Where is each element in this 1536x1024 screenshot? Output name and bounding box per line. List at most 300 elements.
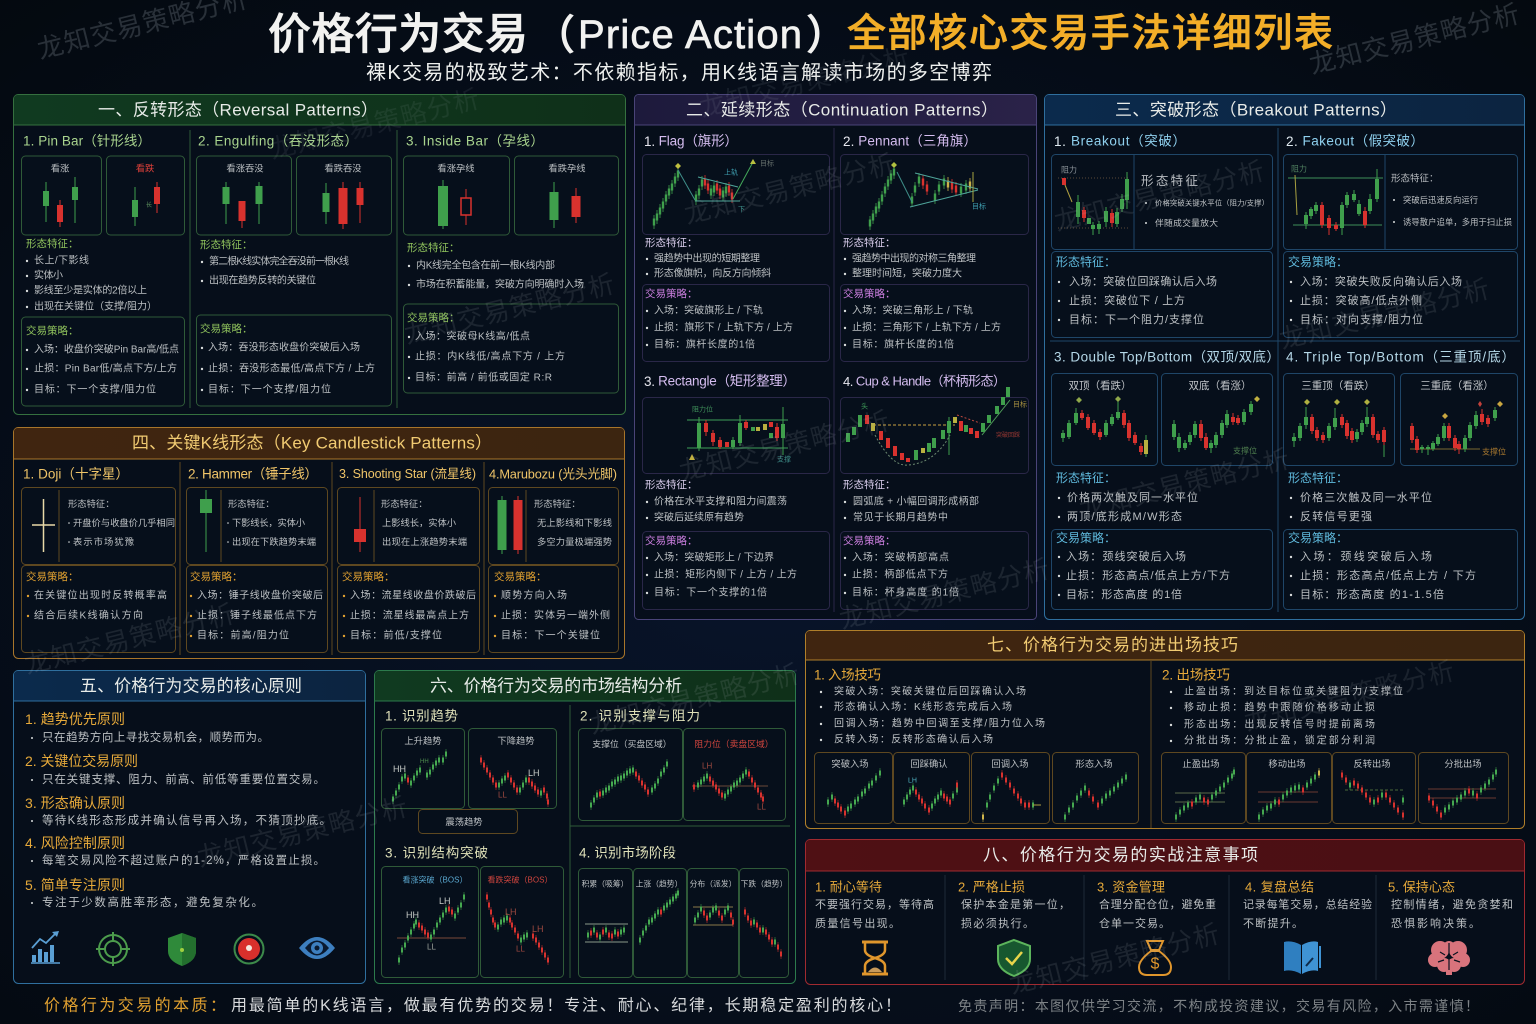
uptrend chart: 上升趋势 bbox=[404, 735, 442, 746]
sub-section: double top bottom bbox=[1052, 350, 1280, 610]
downtrend chart: 下降趋势 bbox=[497, 735, 535, 746]
downtrend chart: LL bbox=[498, 790, 507, 800]
icon: blue book bbox=[1284, 941, 1320, 974]
chart: breakout entry: 突破入场 bbox=[831, 758, 869, 769]
flag title: 1. Flag（旗形） bbox=[644, 134, 738, 148]
flag chart: 上轨 bbox=[724, 168, 738, 176]
triple top bottom strategy: 目标：形态高度 的1-1.5倍 bbox=[1300, 587, 1444, 601]
triple bottom chart bbox=[1400, 374, 1518, 466]
fakeout title: 2. Fakeout（假突破） bbox=[1286, 134, 1424, 148]
watermarks: 龙知交易策略分析 bbox=[1051, 155, 1268, 237]
principles list: 2. 关键位交易原则 bbox=[25, 753, 138, 769]
marubozu strategy bbox=[488, 566, 618, 652]
engulfing strategy: 止损：吞没形态最低/高点下方 / 上方 bbox=[208, 362, 375, 374]
heading: candlesticks: 四、关键K线形态（Key Candlestick Patterns） bbox=[132, 434, 492, 452]
note: review: 不断提升。 bbox=[1243, 916, 1303, 930]
chart: reversal exit: 反转出场 bbox=[1353, 758, 1391, 769]
watermarks: 龙知交易策略分析 bbox=[1006, 918, 1223, 1000]
fakeout strategy: 入场：突破失败反向确认后入场 bbox=[1300, 274, 1462, 288]
double top bottom features: 形态特征： bbox=[1056, 470, 1116, 485]
inside bar features bbox=[407, 241, 584, 290]
fakeout strategy: 交易策略： bbox=[1288, 254, 1348, 269]
shooting star strategy bbox=[338, 566, 480, 652]
icon: money bag bbox=[1139, 941, 1171, 975]
pin bar strategy: 交易策略： bbox=[26, 324, 78, 337]
bullish BOS chart: HH bbox=[406, 910, 419, 920]
triple top bottom features: 价格三次触及同一水平位 bbox=[1300, 490, 1432, 504]
distribution chart bbox=[688, 868, 738, 978]
flag chart bbox=[642, 154, 830, 234]
sub-section: rectangle bbox=[642, 374, 830, 610]
fakeout inner features: 突破后迅速反向运行 bbox=[1403, 195, 1478, 205]
hammer strategy: 止损：锤子线最低点下方 bbox=[197, 608, 317, 622]
shooting star strategy: 目标：前低/支撑位 bbox=[350, 628, 442, 642]
principles list: 只在趋势方向上寻找交易机会，顺势而为。 bbox=[42, 730, 269, 744]
pennant chart bbox=[840, 154, 1028, 234]
cup and handle strategy: 止损：柄部低点下方 bbox=[852, 568, 948, 580]
bullish BOS chart bbox=[382, 866, 478, 978]
bearish BOS chart: LH bbox=[505, 907, 517, 917]
heading: notes: 八、价格行为交易的实战注意事项 bbox=[983, 846, 1258, 864]
subtitle: 裸K交易的极致艺术：不依赖指标，用K线语言解读市场的多空博弈 bbox=[366, 61, 992, 84]
panel: continuation patterns bbox=[634, 94, 1036, 620]
inside bar strategy: 止损：内K线低/高点下方 / 上方 bbox=[415, 350, 565, 362]
principles list: 1. 趋势优先原则 bbox=[25, 711, 125, 727]
rectangle chart: 支撑 bbox=[777, 454, 791, 464]
exit techniques text: 移动止损：趋势中跟随价格移动止损 bbox=[1184, 700, 1375, 714]
inside bar strategy: 入场：突破母K线高/低点 bbox=[415, 330, 530, 342]
support chart: 支撑位（买盘区域） bbox=[592, 738, 672, 749]
triple top bottom features: 反转信号更强 bbox=[1300, 509, 1372, 523]
title bbox=[268, 11, 1333, 59]
chart: scale-out exit: 分批出场 bbox=[1444, 758, 1482, 769]
entry techniques text: 反转入场：反转形态确认后入场 bbox=[834, 732, 993, 746]
pin bar features: 形态特征： bbox=[26, 237, 78, 250]
fakeout strategy bbox=[1284, 252, 1518, 338]
fakeout inner features bbox=[1391, 172, 1512, 227]
inside bar features: 内K线完全包含在前一根K线内部 bbox=[416, 258, 555, 272]
shooting star strategy: 交易策略： bbox=[342, 570, 394, 583]
panel: breakout patterns bbox=[1044, 94, 1524, 620]
triple top chart bbox=[1284, 374, 1394, 466]
bearish BOS chart bbox=[480, 866, 564, 978]
heading: continuation: 二、延续形态（Continuation Patterns） bbox=[686, 100, 998, 120]
triple top bottom features bbox=[1288, 470, 1432, 523]
pin bar features: 实体小 bbox=[34, 268, 63, 282]
pin bar strategy: 目标：下一个支撑/阻力位 bbox=[34, 382, 156, 396]
bearish inside bar chart: 看跌孕线 bbox=[548, 162, 586, 174]
rectangle strategy: 止损：矩形内侧下 / 上方 / 上方 bbox=[654, 568, 797, 580]
double top chart: 双顶（看跌） bbox=[1068, 379, 1132, 392]
bearish pin bar chart: 长 bbox=[146, 201, 152, 209]
bearish engulfing chart bbox=[296, 156, 392, 235]
double top bottom title: 3. Double Top/Bottom（双顶/双底） bbox=[1054, 350, 1280, 364]
shooting star card: 形态特征： bbox=[381, 498, 428, 509]
icon: money bag: $ bbox=[1151, 956, 1160, 972]
watermarks: 龙知交易策略分析 bbox=[676, 405, 893, 487]
pin bar features bbox=[26, 237, 157, 312]
bearish engulfing chart: 看跌吞没 bbox=[324, 162, 362, 174]
pennant strategy: 止损：三角形下 / 上轨下方 / 上方 bbox=[852, 320, 1001, 334]
bullish BOS chart: 看涨突破（BOS） bbox=[403, 874, 467, 884]
rectangle strategy: 交易策略： bbox=[645, 534, 698, 547]
flag chart: 下 bbox=[738, 206, 745, 214]
double top chart bbox=[1052, 374, 1158, 466]
principles list: 5. 简单专注原则 bbox=[25, 877, 125, 893]
flag chart: 目标 bbox=[760, 158, 774, 168]
marubozu strategy: 顺势方向入场 bbox=[501, 588, 567, 602]
panel: reversal patterns bbox=[14, 94, 626, 414]
chart: trailing stop exit bbox=[1246, 752, 1332, 824]
breakout strategy: 止损：突破位下 / 上方 bbox=[1069, 293, 1185, 307]
entry techniques text: 形态确认入场：K线形态完成后入场 bbox=[834, 700, 1012, 713]
sub-section: engulfing bbox=[196, 134, 392, 406]
bearish BOS chart: 看跌突破（BOS） bbox=[488, 874, 552, 884]
icon: red target bbox=[234, 934, 264, 964]
hammer strategy: 目标：前高/阻力位 bbox=[197, 628, 289, 642]
panel: core principles bbox=[14, 670, 366, 984]
shooting star strategy: 止损：流星线最高点上方 bbox=[350, 608, 469, 622]
engulfing strategy bbox=[196, 315, 392, 406]
triple top bottom features: 形态特征： bbox=[1288, 470, 1348, 485]
triple top bottom strategy bbox=[1284, 530, 1518, 610]
hammer strategy: 交易策略： bbox=[190, 570, 242, 583]
exit techniques text: 分批出场：分批止盈，锁定部分利润 bbox=[1184, 734, 1375, 746]
note: mindset: 恐惧影响决策。 bbox=[1391, 916, 1480, 930]
chart: breakout entry bbox=[814, 752, 892, 824]
pennant strategy: 目标：旗杆长度的1倍 bbox=[852, 338, 954, 350]
icon: green target bbox=[96, 932, 130, 966]
heading: breakout: 三、突破形态（Breakout Patterns） bbox=[1115, 100, 1397, 120]
principles list: 3. 形态确认原则 bbox=[25, 795, 125, 811]
sub-section: pennant bbox=[840, 134, 1028, 362]
footer essence statement: 用最简单的K线语言，做最有优势的交易！专注、耐心、纪律，长期稳定盈利的核心！ bbox=[231, 996, 901, 1014]
rectangle features: 突破后延续原有趋势 bbox=[654, 510, 744, 524]
title: 价格行为交易 bbox=[268, 11, 528, 59]
engulfing features: 出现在趋势反转的关键位 bbox=[209, 274, 316, 286]
principles list: 4. 风险控制原则 bbox=[25, 835, 125, 851]
triple bottom chart: 支撑位 bbox=[1482, 446, 1506, 456]
marubozu strategy: 止损：实体另一端外侧 bbox=[501, 608, 610, 622]
exit techniques text: 止盈出场：到达目标位或关键阻力/支撑位 bbox=[1184, 684, 1403, 698]
note: stop loss: 保护本金是第一位， bbox=[961, 897, 1070, 911]
watermarks: 龙知交易策略分析 bbox=[586, 658, 803, 740]
pin bar features: 出现在关键位（支撑/阻力） bbox=[34, 300, 157, 312]
marubozu card: 形态特征： bbox=[534, 498, 580, 509]
cup and handle strategy: 入场：突破柄部高点 bbox=[852, 550, 949, 564]
principles list: 专注于少数高胜率形态，避免复杂化。 bbox=[42, 895, 263, 909]
breakout chart box bbox=[1052, 154, 1272, 250]
icon: brain bbox=[1428, 941, 1470, 975]
note: review bbox=[1243, 880, 1372, 930]
watermarks: 龙知交易策略分析 bbox=[194, 791, 411, 873]
chart: pattern entry bbox=[1052, 752, 1138, 824]
sideways trend label bbox=[418, 810, 518, 834]
engulfing features bbox=[200, 238, 349, 286]
engulfing strategy: 目标：下一个支撑/阻力位 bbox=[208, 382, 331, 396]
chart: pullback entry: 回调入场 bbox=[991, 759, 1029, 769]
pennant features bbox=[843, 236, 976, 280]
sub-section: marubozu bbox=[488, 466, 618, 652]
resistance chart: 阻力位（卖盘区域） bbox=[694, 738, 774, 749]
note: stop loss: 2. 严格止损 bbox=[958, 880, 1025, 894]
uptrend chart bbox=[382, 728, 464, 808]
watermarks: 龙知交易策略分析 bbox=[681, 148, 898, 230]
heading: principles: 五、价格行为交易的核心原则 bbox=[80, 676, 302, 696]
rectangle features: 价格在水平支撑和阻力间震荡 bbox=[654, 494, 787, 508]
resistance chart: LH bbox=[702, 762, 712, 770]
triple top bottom strategy: 交易策略： bbox=[1288, 530, 1348, 545]
shooting star card bbox=[338, 488, 480, 564]
triple bottom chart: 三重底（看涨） bbox=[1420, 379, 1494, 392]
heading: entry exit: 七、价格行为交易的进出场技巧 bbox=[987, 636, 1238, 654]
bullish BOS chart: LH bbox=[439, 896, 451, 906]
marubozu strategy: 交易策略： bbox=[494, 570, 546, 583]
hammer strategy: 入场：锤子线收盘价突破后 bbox=[197, 588, 323, 602]
sub-section: shooting star bbox=[338, 467, 480, 652]
note: stop loss bbox=[958, 880, 1070, 930]
title: （ bbox=[534, 12, 575, 58]
watermarks: 龙知交易策略分析 bbox=[696, 41, 913, 123]
entry techniques text bbox=[814, 668, 1045, 746]
hammer title: 2. Hammer（锤子线） bbox=[188, 466, 318, 482]
title: 全部核心交易手法详细列表 bbox=[847, 12, 1333, 56]
resistance chart: LL bbox=[757, 802, 766, 812]
doji card: 开盘价与收盘价几乎相同 bbox=[73, 517, 175, 528]
breakout strategy: 目标：下一个阻力/支撑位 bbox=[1069, 312, 1204, 326]
rectangle strategy: 入场：突破矩形上 / 下边界 bbox=[654, 550, 774, 564]
double top bottom strategy: 止损：形态高点/低点上方/下方 bbox=[1066, 568, 1230, 582]
note: review: 4. 复盘总结 bbox=[1245, 880, 1314, 894]
sub-section: pin bar bbox=[22, 134, 184, 406]
sub-section: flag bbox=[642, 134, 830, 362]
uptrend chart: HH bbox=[393, 764, 406, 774]
marubozu card bbox=[488, 488, 618, 564]
flag features: 强趋势中出现的短期整理 bbox=[654, 252, 760, 264]
fakeout inner features: 诱导散户追单，多用于扫止损 bbox=[1403, 217, 1512, 227]
flag features: 形态特征： bbox=[645, 236, 698, 249]
sub-section: structure break bbox=[382, 846, 564, 978]
rectangle title: 3. Rectangle（矩形整理） bbox=[644, 374, 796, 388]
bullish pin bar chart bbox=[22, 156, 102, 235]
rectangle features bbox=[645, 478, 787, 524]
markdown chart: 下跌（趋势） bbox=[741, 878, 787, 888]
exit techniques text bbox=[1162, 668, 1403, 746]
flag strategy: 止损：旗形下 / 上轨下方 / 上方 bbox=[654, 320, 793, 334]
heading: reversal: 一、反转形态（Reversal Patterns） bbox=[98, 100, 378, 120]
icon: hourglass bbox=[862, 942, 888, 974]
cup and handle strategy bbox=[840, 532, 1028, 610]
resistance chart bbox=[684, 728, 786, 820]
downtrend chart bbox=[468, 728, 556, 808]
double top bottom strategy: 入场：颈线突破后入场 bbox=[1066, 549, 1186, 563]
rectangle chart: 阻力位 bbox=[692, 404, 713, 414]
breakout title: 1. Breakout（突破） bbox=[1054, 134, 1186, 148]
sub-section: triple top bottom bbox=[1284, 350, 1518, 610]
bearish inside bar chart bbox=[514, 156, 618, 235]
fakeout inner features: 形态特征： bbox=[1391, 172, 1439, 184]
engulfing strategy: 入场：吞没形态收盘价突破后入场 bbox=[208, 340, 360, 354]
bullish pin bar chart: 看涨 bbox=[51, 162, 69, 174]
structure break title: 3. 识别结构突破 bbox=[385, 846, 488, 860]
icon: marubozu candles bbox=[498, 496, 522, 554]
double top bottom strategy: 目标：形态高度 的1倍 bbox=[1066, 587, 1182, 601]
inside bar strategy: 目标：前高 / 前低或固定 R:R bbox=[415, 370, 552, 384]
chart: retest confirmation bbox=[894, 752, 970, 824]
breakout inner features: 形态特征 bbox=[1141, 173, 1198, 188]
doji strategy: 在关键位出现时反转概率高 bbox=[34, 588, 167, 602]
engulfing title: 2. Engulfing（吞没形态） bbox=[198, 134, 358, 148]
panel: practical notes bbox=[806, 840, 1524, 984]
flag strategy: 交易策略： bbox=[645, 287, 698, 300]
marubozu card: 多空力量极端强势 bbox=[537, 536, 612, 547]
chart: pullback entry bbox=[972, 752, 1050, 824]
shooting star card: 出现在上涨趋势末端 bbox=[382, 536, 467, 547]
chart: take profit exit bbox=[1162, 752, 1246, 824]
entry techniques text: 回调入场：趋势中回调至支撑/阻力位入场 bbox=[834, 716, 1045, 730]
pin bar strategy: 止损：Pin Bar低/高点下方/上方 bbox=[34, 362, 177, 374]
cup and handle chart: 目标 bbox=[1013, 400, 1027, 408]
sub-section: identify trend bbox=[382, 708, 556, 834]
marubozu title: 4.Marubozu (光头光脚) bbox=[489, 466, 617, 482]
bullish BOS chart: LL bbox=[427, 942, 436, 952]
bearish BOS chart: LL bbox=[516, 944, 525, 954]
bullish engulfing chart bbox=[196, 156, 292, 235]
title: ） bbox=[806, 12, 847, 58]
watermarks: 龙知交易策略分析 bbox=[836, 553, 1053, 635]
doji title: 1. Doji（十字星） bbox=[23, 466, 129, 482]
pennant features: 强趋势中出现的对称三角整理 bbox=[852, 252, 976, 264]
doji strategy: 结合后续K线确认方向 bbox=[34, 608, 143, 622]
note: mindset bbox=[1388, 880, 1513, 930]
sub-section: breakout bbox=[1052, 134, 1272, 338]
pennant features: 整理时间短，突破力度大 bbox=[852, 266, 962, 280]
cup and handle chart: 突破回踩 bbox=[996, 431, 1020, 439]
flag strategy bbox=[642, 284, 830, 362]
bearish BOS chart: LH bbox=[532, 924, 544, 934]
double bottom chart bbox=[1162, 374, 1272, 466]
icon: rising bar chart bbox=[31, 931, 60, 963]
markdown chart bbox=[740, 868, 788, 978]
engulfing features: 第二根K线实体完全吞没前一根K线 bbox=[209, 254, 349, 268]
watermarks: 龙知交易策略分析 bbox=[266, 83, 483, 165]
breakout inner features: 价格突破关键水平位（阻力/支撑） bbox=[1155, 198, 1269, 208]
title: Price Action bbox=[578, 13, 802, 57]
watermarks: 龙知交易策略分析 bbox=[1241, 655, 1458, 737]
rectangle strategy: 目标：下一个支撑的1倍 bbox=[654, 586, 767, 598]
hammer card bbox=[186, 488, 328, 564]
hammer strategy bbox=[186, 566, 328, 652]
bullish inside bar chart: 看涨孕线 bbox=[437, 162, 475, 174]
footer disclaimer: 免责声明：本图仅供学习交流，不构成投资建议，交易有风险，入市需谨慎！ bbox=[958, 998, 1479, 1014]
cup and handle chart bbox=[840, 387, 1028, 474]
pennant features: 形态特征： bbox=[843, 236, 896, 249]
rectangle chart bbox=[642, 398, 830, 474]
triple top bottom title: 4. Triple Top/Bottom（三重顶/底） bbox=[1286, 350, 1515, 364]
fakeout chart box bbox=[1284, 154, 1518, 250]
panel: entry and exit bbox=[806, 630, 1524, 828]
pin bar title: 1. Pin Bar（针形线） bbox=[23, 134, 151, 148]
pennant strategy: 交易策略： bbox=[843, 287, 896, 300]
engulfing features: 形态特征： bbox=[200, 238, 252, 251]
chart: trailing stop exit: 移动出场 bbox=[1268, 758, 1306, 769]
principles list: 每笔交易风险不超过账户的1-2%，严格设置止损。 bbox=[42, 853, 325, 867]
hammer card: 下影线长，实体小 bbox=[232, 517, 306, 528]
cup and handle features: 圆弧底 + 小幅回调形成柄部 bbox=[853, 494, 979, 508]
sub-section: market stages bbox=[578, 844, 788, 978]
watermarks: 龙知交易策略分析 bbox=[21, 598, 238, 680]
icon: eye bbox=[299, 937, 335, 959]
note: patience bbox=[815, 880, 934, 930]
sub-section: support resistance bbox=[578, 708, 786, 820]
note: stop loss: 损必须执行。 bbox=[961, 916, 1034, 930]
markup chart: 上涨（趋势） bbox=[636, 878, 682, 888]
shooting star strategy: 入场：流星线收盘价跌破后 bbox=[350, 588, 476, 602]
triple top bottom strategy: 入场：颈线突破后入场 bbox=[1300, 549, 1432, 563]
downtrend chart: LH bbox=[528, 768, 540, 778]
icon: shooting star candle bbox=[354, 497, 366, 552]
principles list: 只在关键支撑、阻力、前高、前低等重要位置交易。 bbox=[42, 772, 325, 786]
breakout inner features bbox=[1141, 173, 1269, 228]
bearish pin bar chart bbox=[106, 156, 184, 235]
flag strategy: 入场：突破旗形上 / 下轨 bbox=[654, 304, 763, 316]
sub-section: cup and handle bbox=[840, 374, 1028, 610]
watermarks: 龙知交易策略分析 bbox=[1276, 273, 1493, 355]
sub-section: hammer bbox=[186, 466, 328, 652]
shooting star title: 3. Shooting Star (流星线) bbox=[339, 467, 476, 481]
chart: take profit exit: 止盈出场 bbox=[1182, 758, 1220, 769]
note: money management: 3. 资金管理 bbox=[1097, 880, 1165, 894]
note: money management: 合理分配仓位，避免重 bbox=[1099, 897, 1216, 911]
sub-section: inside bar bbox=[404, 134, 618, 393]
panel: key candlestick patterns bbox=[14, 428, 624, 658]
pennant strategy: 入场：突破三角形上 / 下轨 bbox=[852, 304, 973, 316]
breakout strategy: 入场：突破位回踩确认后入场 bbox=[1069, 274, 1217, 288]
sub-section: fakeout bbox=[1284, 134, 1518, 338]
chart: retest confirmation: 回踩确认 bbox=[910, 758, 948, 769]
hammer card: 出现在下跌趋势末端 bbox=[232, 536, 316, 547]
note: mindset: 5. 保持心态 bbox=[1388, 880, 1455, 894]
triple top bottom strategy: 止损：形态高点/低点上方 / 下方 bbox=[1300, 568, 1476, 582]
breakout inner features: 伴随成交量放大 bbox=[1155, 217, 1218, 228]
watermarks: 龙知交易策略分析 bbox=[1306, 0, 1523, 80]
rectangle features: 形态特征： bbox=[645, 478, 698, 491]
inside bar title: 3. Inside Bar（孕线） bbox=[406, 134, 544, 148]
note: patience: 不要强行交易，等待高 bbox=[815, 897, 934, 911]
cup and handle features: 常见于长期月趋势中 bbox=[853, 510, 948, 524]
rectangle strategy bbox=[642, 532, 830, 610]
footer essence statement: 价格行为交易的本质： bbox=[44, 996, 226, 1014]
pennant strategy bbox=[840, 284, 1028, 362]
note: mindset: 控制情绪，避免贪婪和 bbox=[1391, 897, 1513, 911]
breakout chart box: 阻力 bbox=[1061, 164, 1077, 174]
fakeout chart box: 阻力 bbox=[1291, 164, 1307, 174]
engulfing strategy: 交易策略： bbox=[200, 322, 252, 335]
double top bottom features bbox=[1056, 470, 1198, 523]
icon: shield bbox=[168, 933, 196, 966]
distribution chart: 分布（派发） bbox=[690, 878, 736, 888]
inside bar features: 市场在积蓄能量，突破方向明确时入场 bbox=[416, 278, 584, 290]
double top bottom features: 价格两次触及同一水平位 bbox=[1067, 490, 1198, 504]
exit techniques text: 2. 出场技巧 bbox=[1162, 668, 1230, 682]
note: money management bbox=[1097, 880, 1216, 930]
bearish pin bar chart: 看跌 bbox=[136, 162, 154, 174]
double top bottom features: 两顶/底形成M/W形态 bbox=[1067, 509, 1182, 523]
pennant title: 2. Pennant（三角旗） bbox=[843, 134, 977, 148]
support chart bbox=[578, 728, 682, 820]
chart: scale-out exit bbox=[1418, 752, 1508, 824]
icon: check shield bbox=[998, 940, 1030, 976]
